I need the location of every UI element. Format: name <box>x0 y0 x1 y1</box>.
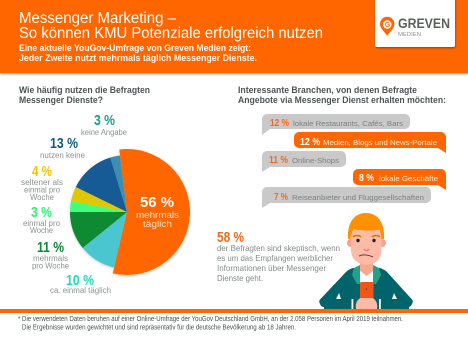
pie label: 4 % seltener als einmal pro Woche: 4 % <box>32 163 52 180</box>
heading: left: Messenger Dienste? <box>19 95 103 106</box>
pie label: 3 % einmal pro Woche: 3 % <box>31 204 52 221</box>
bubble: Online-Shops: Online-Shops <box>292 156 339 165</box>
pie label: 56 %: täglich <box>143 219 172 229</box>
footer rule <box>0 309 468 313</box>
callout: 58 % <box>217 230 340 283</box>
bubble: Medien, Blogs: Medien, Blogs und News-Portale <box>323 138 437 147</box>
bubble: Reiseanbieter: 7 % <box>274 191 289 203</box>
pie label: 56 % <box>136 194 180 229</box>
pie label: 13 % nutzen keine <box>40 135 86 160</box>
pie label: 3 % keine Angabe <box>81 112 128 137</box>
pie label: 10 % ca. einmal täglich: 10 % <box>66 272 94 289</box>
title: So können KMU Potenziale erfolgreich nutzen <box>19 25 323 42</box>
heading: right: Angebote via Messenger Dienst erhalten möchten: <box>238 95 446 106</box>
bubble: lokale Restaurants: 12 % <box>270 117 290 129</box>
pie label: 3 % keine Angabe: 3 % <box>94 112 115 129</box>
callout: 58 %: der Befragten sind skeptisch, wenn <box>217 243 340 253</box>
bubble: Reiseanbieter <box>262 187 431 208</box>
callout: 58 %: Dienste geht. <box>217 273 263 283</box>
title: Messenger Marketing – <box>19 10 176 27</box>
footnote: * Die verwendeten Daten beruhen auf einer Online-Umfrage der YouGov Deutschland GmbH, an der 2.058 Personen im April 2019 teilnahmen. <box>18 316 403 323</box>
pie chart <box>70 149 190 275</box>
pie label: 4 % seltener als einmal pro Woche <box>21 163 63 202</box>
pie label: 56 %: mehrmals <box>136 210 180 220</box>
pie label: 3 % einmal pro Woche <box>23 204 61 235</box>
pie label: 10 % ca. einmal täglich <box>50 272 111 295</box>
pie label: 11 % mehrmals pro Woche <box>32 239 70 270</box>
footnote: Die Ergebnisse wurden gewichtet und sind repräsentativ für die deutsche Bevölkerung ab 18 Jahren. <box>22 324 296 332</box>
pie label: 13 % nutzen keine: 13 % <box>50 135 78 152</box>
callout: 58 %: Informationen über Messenger <box>217 263 326 273</box>
pie label: 3 % keine Angabe: keine Angabe <box>81 128 128 137</box>
subtitle: Jeder Zweite nutzt mehrmals täglich Messenger Dienste. <box>19 53 257 63</box>
logo card <box>375 0 455 47</box>
bubble: lokale Restaurants: lokale Restaurants, Cafés, Bars <box>293 119 403 128</box>
bubble: lokale Geschäfte <box>353 169 446 190</box>
pie label: 13 % nutzen keine: nutzen keine <box>40 151 86 160</box>
bubble: lokale Restaurants <box>262 114 410 135</box>
pie label: 56 %: 56 % <box>140 194 174 211</box>
title <box>19 10 323 42</box>
subtitle <box>19 43 257 63</box>
bubble: Medien, Blogs <box>294 132 446 153</box>
pie label: 3 % einmal pro Woche: Woche <box>30 226 54 235</box>
pie label: 11 % mehrmals pro Woche: mehrmals <box>33 254 68 263</box>
pie label: 3 % einmal pro Woche: einmal pro <box>23 219 61 228</box>
bubble: lokale Geschäfte: lokale Geschäfte <box>379 174 438 183</box>
pie label: 11 % mehrmals pro Woche: 11 % <box>37 239 64 256</box>
pie label: 4 % seltener als einmal pro Woche: einmal pro <box>24 186 61 194</box>
subtitle: Eine aktuelle YouGov-Umfrage von Greven Medien zeigt: <box>19 43 251 53</box>
pie label: 11 % mehrmals pro Woche: pro Woche <box>32 262 70 270</box>
pie label: 4 % seltener als einmal pro Woche: seltener als <box>21 178 63 187</box>
bubble: lokale Geschäfte: 8 % <box>359 172 375 184</box>
callout: 58 %: 58 % <box>217 230 244 246</box>
bubble: Online-Shops: 11 % <box>269 154 289 166</box>
logo card: GREVEN <box>398 16 450 31</box>
heading: right <box>238 85 446 106</box>
bubble: Reiseanbieter: Reiseanbieter und Fluggesellschaften <box>292 193 424 202</box>
bubble: Online-Shops <box>262 151 346 172</box>
footnote <box>18 316 403 332</box>
pie label: 10 % ca. einmal täglich: ca. einmal täglich <box>50 286 111 295</box>
header banner <box>0 0 468 73</box>
pie label: 4 % seltener als einmal pro Woche: Woche <box>30 193 55 202</box>
icon: man with phone <box>319 213 413 309</box>
heading: right: Interessante Branchen, von denen Befragte <box>238 85 417 96</box>
heading: left: Wie häufig nutzen die Befragten <box>19 85 150 96</box>
icon: map pin: G <box>385 22 391 29</box>
bubble: Medien, Blogs: 12 % <box>300 136 321 148</box>
heading: left <box>19 85 150 106</box>
logo card: MEDIEN <box>398 32 421 38</box>
callout: 58 %: es um das Empfangen werblicher <box>217 253 333 263</box>
